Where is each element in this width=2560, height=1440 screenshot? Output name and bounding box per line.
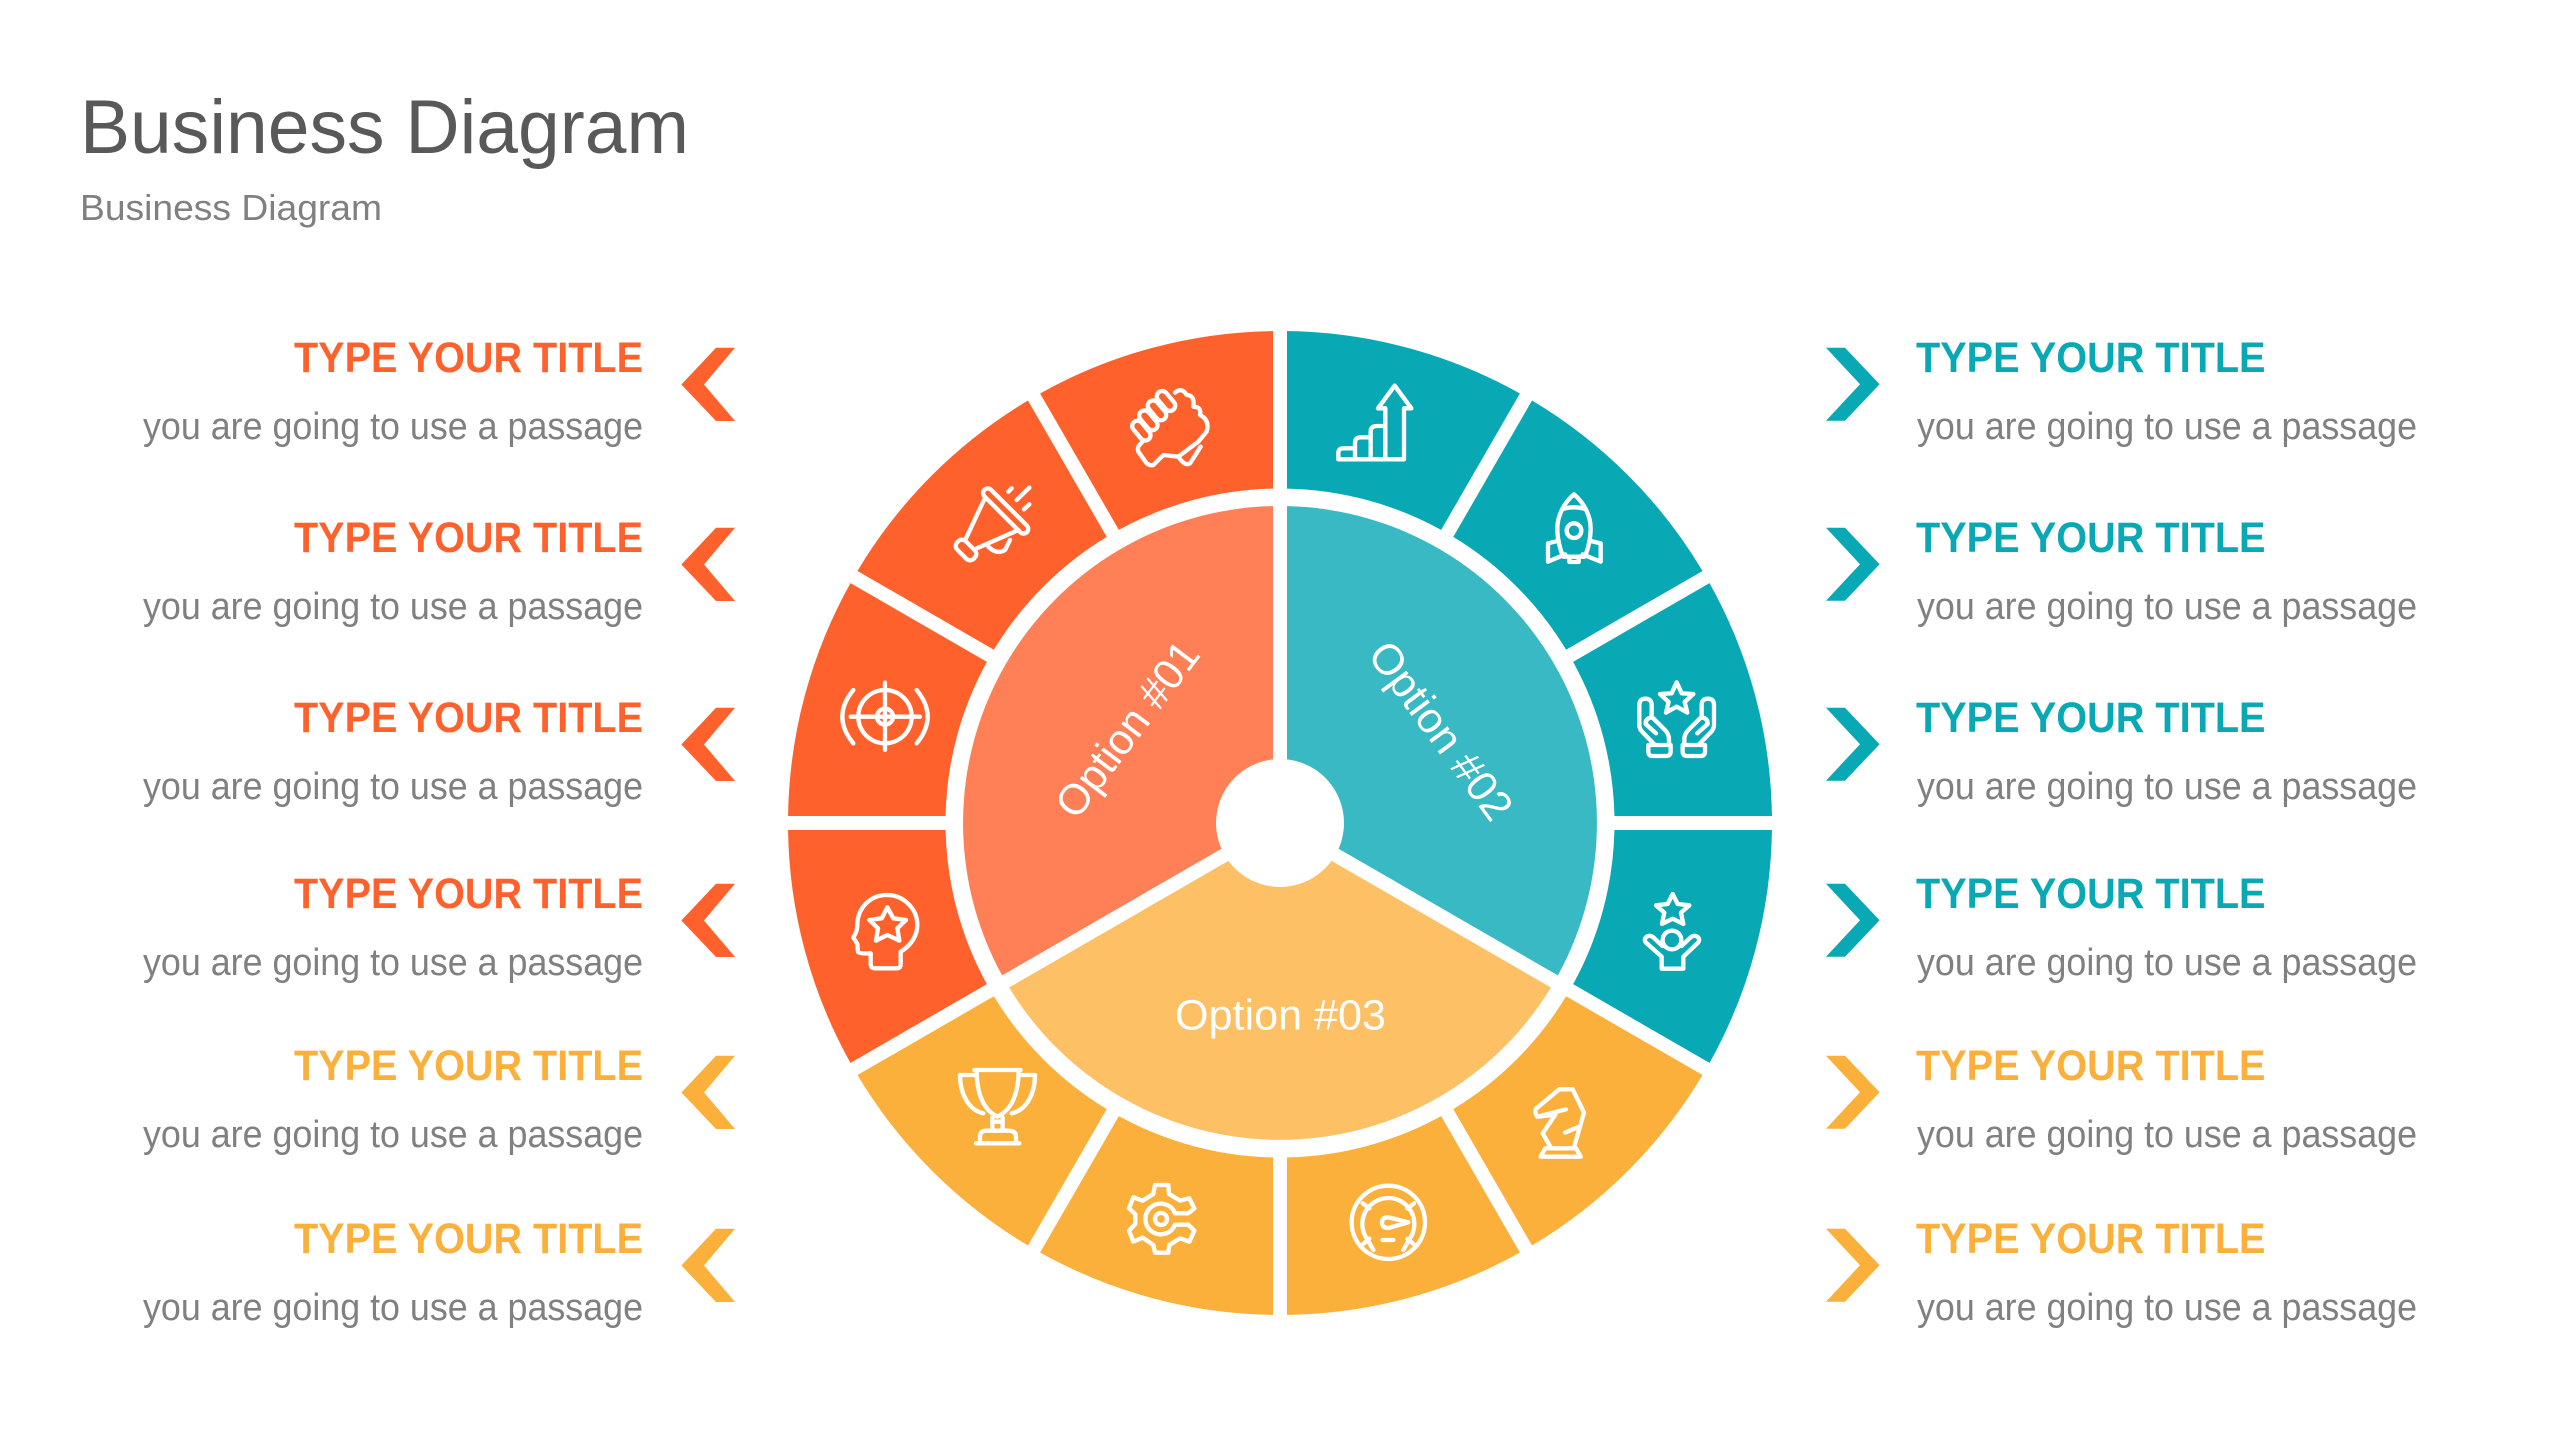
left row 6 [143,1215,735,1329]
pie sector: option 02 [1287,506,1597,975]
description: you are going to use a passage [1917,1114,2417,1156]
chevron [1826,348,1880,421]
left row 4 [143,870,735,984]
heading: TYPE YOUR TITLE [294,334,643,382]
label: option 01: Option #01 [1046,632,1210,827]
description: you are going to use a passage [143,406,643,448]
chevron [681,348,735,421]
segment: lower left red [788,830,987,1063]
pie sector: option 03 [1009,861,1551,1140]
left column rows [143,334,735,1329]
segment: upper left red 3 [1040,331,1273,530]
chevron [681,708,735,781]
description: you are going to use a passage [1917,766,2417,808]
right row 5 [1826,1042,2417,1156]
pie sector: option 01 [963,506,1273,975]
segment: lower right orange 1 [1453,996,1703,1246]
heading: TYPE YOUR TITLE [294,1215,643,1263]
description: you are going to use a passage [1917,586,2417,628]
icon: target crosshair [842,683,928,750]
icon: person with star [1645,894,1699,969]
segment: top right 2 [1453,400,1703,650]
left row 1 [143,334,735,448]
segment: lower left orange 2 [857,996,1107,1246]
description: you are going to use a passage [143,586,643,628]
description: you are going to use a passage [1917,1287,2417,1329]
chevron [681,1056,735,1129]
icon: megaphone [954,486,1030,562]
subtitle: Business Diagram [80,187,382,228]
label: option 03: Option #03 [1175,992,1386,1040]
left row 3 [143,694,735,808]
icon: hands holding star [1639,682,1714,756]
outer ring of twelve segments [788,331,1772,1315]
label: option 02: Option #02 [1358,632,1522,830]
title: Business Diagram [80,85,689,170]
heading: TYPE YOUR TITLE [1916,694,2266,742]
icon: chess knight [1535,1089,1584,1157]
description: you are going to use a passage [143,942,643,984]
heading: TYPE YOUR TITLE [294,1042,643,1090]
icon: head with star [853,895,917,968]
heading: TYPE YOUR TITLE [1916,1042,2266,1090]
description: you are going to use a passage [1917,942,2417,984]
segment: lower left orange 1 [1040,1116,1273,1315]
chevron [1826,1229,1880,1302]
right row 6 [1826,1215,2417,1329]
icon: rocket [1548,494,1601,562]
heading: TYPE YOUR TITLE [1916,334,2266,382]
heading: TYPE YOUR TITLE [1916,514,2266,562]
chevron [681,884,735,957]
right row 3 [1826,694,2417,808]
right row 2 [1826,514,2417,628]
heading: TYPE YOUR TITLE [1916,1215,2266,1263]
segment: upper left red 1 [788,583,987,816]
heading: TYPE YOUR TITLE [294,694,643,742]
icon: clasped hands [1130,389,1207,465]
icon: gear [1129,1185,1194,1253]
description: you are going to use a passage [143,1114,643,1156]
chevron [1826,1056,1880,1129]
segment: lower right orange 2 [1287,1116,1520,1315]
left row 2 [143,514,735,628]
description: you are going to use a passage [143,1287,643,1329]
right column rows [1826,334,2417,1329]
chevron [681,528,735,601]
chevron [1826,528,1880,601]
icon: speed gauge [1352,1186,1425,1259]
left row 5 [143,1042,735,1156]
heading: TYPE YOUR TITLE [1916,870,2266,918]
right row 1 [1826,334,2417,448]
icon: trophy [960,1070,1035,1143]
segment: top right 3 [1573,583,1772,816]
segment: top right 1 [1287,331,1520,530]
chevron [1826,708,1880,781]
heading: TYPE YOUR TITLE [294,514,643,562]
segment: lower right teal [1573,830,1772,1063]
segment: upper left red 2 [857,400,1107,650]
description: you are going to use a passage [1917,406,2417,448]
inner pie of three options [963,506,1597,1140]
heading: TYPE YOUR TITLE [294,870,643,918]
chevron [1826,884,1880,957]
right row 4 [1826,870,2417,984]
description: you are going to use a passage [143,766,643,808]
icon: bar chart with arrow [1338,386,1411,459]
chevron [681,1229,735,1302]
